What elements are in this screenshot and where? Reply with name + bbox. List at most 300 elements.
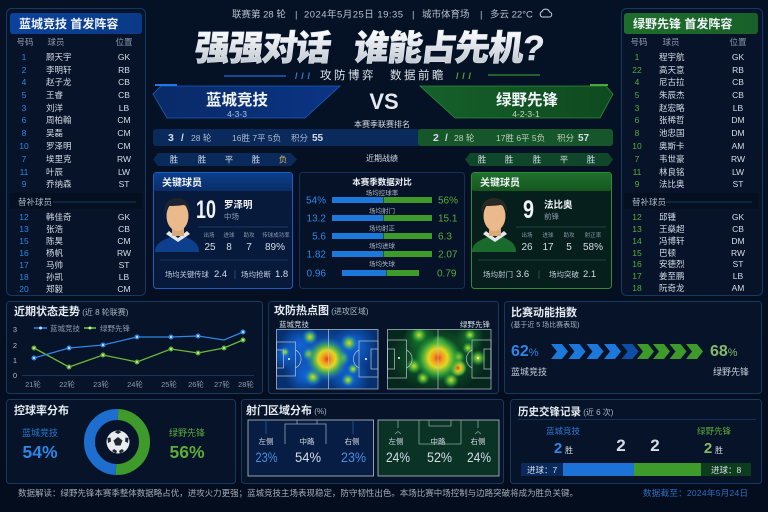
blue starters table: 罗泽明 [46,141,72,151]
green starters table: 池忠国 [659,128,685,138]
blue starters table: 埃里克 [46,154,72,164]
green starters table: LB [733,103,744,113]
season rank bar: 57 [578,133,590,144]
blue wins: 2 [554,440,562,457]
blue starters table: 2 [22,65,27,75]
stats: 58% [583,242,603,253]
season rank bar: 3 [168,132,174,144]
heading: 关键球员 [480,176,520,189]
icon: cloud [540,9,552,17]
shot zones: blue: 54% [295,450,321,465]
green substitutes table: 12 [632,212,642,222]
green starters table: 球员 [662,37,680,47]
blue substitutes table: CM [117,236,131,246]
per-game stats [483,269,596,280]
axis labels: 25轮 [161,379,177,389]
shot zones: blue: 右侧 [344,436,360,446]
row: conceded: 场均失球 [369,259,396,268]
green substitutes table: LB [733,271,744,281]
recent form: blue: 胜 [252,154,261,164]
blue starters table: CM [117,128,131,138]
stats: 助攻 [243,231,255,239]
per-game stats: 3.6 [516,269,529,280]
season rank bar: 55 [312,133,324,144]
subtitle: 数据前瞻 [390,68,446,82]
blue starters table: 11 [20,167,29,177]
row: possession [306,188,458,206]
panel: shot zones: 射门区域分布 (%) [246,403,327,417]
panel: shot zones [242,400,504,484]
season rank bar: / [181,133,184,144]
green starters table: 法比奥 [659,179,685,189]
green substitutes table: 姜至鹏 [659,271,685,281]
row: possession: 56% [438,196,458,206]
green starters table: 10 [632,141,642,151]
donut [89,414,145,470]
axis labels: 28轮 [238,379,254,389]
stats: 5 [566,242,572,253]
recent form: green: 胜 [533,154,542,164]
shot zones: blue: 左侧 [258,436,274,446]
match info bar: 多云 22°C [490,8,533,20]
name: 前锋 [544,211,559,221]
blue substitutes table: 20 [19,284,29,294]
green starters table: 位置 [729,37,747,47]
recent form: blue: 负 [279,154,287,164]
subtitle: /// [456,71,471,81]
blue substitutes table: 16 [19,248,29,258]
stats: 25 [204,242,216,253]
green starters table: 赵宏略 [659,103,685,113]
stats: 出场 [521,231,533,239]
green starters table: DM [731,115,745,125]
axis labels: 23轮 [93,379,109,389]
stats: 17 [542,242,554,253]
blue starters table [16,37,133,189]
panel: season data comparison [300,172,464,288]
panel: attack heatmap [268,302,498,398]
stats: 8 [226,242,232,253]
row: goals: 场均进球 [369,241,396,250]
green starters table: 6 [635,115,640,125]
blue starters table: 4 [22,77,27,87]
green starters table: 9 [635,179,640,189]
season rank bar: 积分 [291,133,309,143]
blue starters table: CB [118,77,130,87]
green wins: 胜 [715,445,723,455]
green substitutes table: DM [731,236,745,246]
green substitutes table: 18 [632,283,642,293]
blue substitutes table: 韩佳奇 [46,212,72,222]
green starters table: AM [732,141,744,151]
per-game stats: 2.1 [583,269,596,280]
row: conceded: 0.96 [307,268,326,280]
green wins [697,426,731,457]
heading: 关键球员 [162,176,202,189]
blue team banner: 4-3-3 [227,109,247,119]
name [544,199,573,221]
stats: 26 [521,242,533,253]
blue starters table: 1 [22,52,27,62]
stats: 7 [246,242,252,253]
blue substitutes table: 13 [19,224,29,234]
recent form: green: 胜 [505,154,514,164]
recent form: green: 胜 [478,154,487,164]
per-game stats: 场均射门 [483,269,513,279]
row: conceded [307,259,457,280]
goals bar: 进球：7 [527,465,558,475]
blue substitutes table: GK [118,212,130,222]
green starters table: 1 [635,52,640,62]
name: 中场 [224,211,239,221]
per-game stats: 1.8 [275,269,288,280]
green starters table: LW [732,167,744,177]
goals bar: 进球：8 [711,465,742,475]
panel: recent form trend [6,302,262,394]
green share: 56% [169,442,205,462]
blue starters table: 10 [19,141,29,151]
green wins: 2 [704,440,712,457]
green starters table: 11 [633,167,642,177]
stats: 射正率 [585,231,602,239]
axis labels: 26轮 [188,379,204,389]
green substitutes table: 冯博轩 [659,236,685,246]
blue starters table: 球员 [47,37,65,47]
blue starters table: LB [119,103,130,113]
blue starters table: 3 [22,103,27,113]
draws: 2 [650,436,660,455]
blue starters table: ST [119,179,129,189]
blue team banner [153,85,340,119]
green team banner: 绿野先锋 [496,90,558,109]
green team banner: 4-2-3-1 [512,109,540,119]
green starters table: 朱辰杰 [659,90,685,100]
blue wins [546,426,580,457]
blue starters table: CB [118,90,130,100]
per-game stats: 场均突破 [549,269,579,279]
line: blue [32,330,245,360]
row: goals [307,241,458,260]
green starters table: 尼古拉 [659,77,685,87]
jersey number: 9 [523,196,534,224]
match info bar: | [412,10,414,20]
panel: attack heatmap: 攻防热点图 (进攻区域) [274,303,369,317]
season rank caption: 本赛季联赛排名 [354,119,410,129]
blue starters table: 号码 [16,37,34,47]
green starters table: RB [732,65,744,75]
green substitutes table: 17 [632,271,642,281]
green starters table: 程宇航 [659,52,685,62]
recent form: green [465,153,613,166]
panel: season data comparison: 本赛季数据对比 [352,177,412,187]
recent form: blue [153,153,297,166]
green starters table: 奥斯卡 [659,141,685,151]
blue starters table: LW [118,167,130,177]
blue starters table: CM [117,115,131,125]
panel: blue team lineup [6,8,146,296]
match info bar: | [480,10,482,20]
blue starters table: 周柏翰 [46,115,72,125]
blue starters table: 9 [22,179,27,189]
row: shots on target: 6.3 [438,232,452,242]
blue substitutes table: 17 [19,260,29,270]
per-game stats: 2.4 [214,269,227,280]
chevrons [551,344,703,359]
blue starters table: 顾天宇 [46,52,72,62]
green substitutes table: 巴顿 [659,248,677,258]
axis labels [13,325,254,389]
panel: green key player [472,172,612,288]
blue substitutes table: 陈昊 [46,236,64,246]
panel: possession distribution: 控球率分布 [14,403,69,417]
panel: recent form trend: 近期状态走势 (近 8 轮联赛) [14,304,129,318]
blue starters table: 李明轩 [46,65,72,75]
shot zones: blue: 中路 [300,436,315,446]
green starters table: 8 [635,128,640,138]
green substitutes table: AM [732,283,744,293]
row: possession: 场均控球率 [366,188,399,197]
blue substitutes table: 杨帆 [46,248,64,258]
blue starters table: 位置 [115,37,133,47]
season rank bar: 28 轮 [191,133,212,143]
green starters table: 22 [632,65,642,75]
stats: 助攻 [563,231,575,239]
green starters table: 高天意 [659,65,685,75]
name: 法比奥 [544,199,573,211]
panel: momentum index: 蓝城竞技 [511,366,547,377]
shot zones: green [378,420,499,476]
blue substitutes table: 马帅 [46,260,63,270]
stats [198,227,290,253]
main title [193,29,546,68]
heatmap: blue team [276,329,378,390]
blue value: 62% [511,343,539,360]
green starters table: 韦世豪 [659,154,685,164]
main title: 谁能占先机? [352,29,546,68]
axis labels: 3 [13,325,17,334]
green substitutes table: 13 [632,224,642,234]
blue starters table: 6 [22,115,27,125]
green substitutes table: CB [732,224,744,234]
recent form: blue: 胜 [170,154,179,164]
green share: 绿野先锋 [169,427,205,438]
green substitutes table: ST [733,259,743,269]
axis labels: 22轮 [59,379,75,389]
blue substitutes table: LB [119,272,130,282]
match info bar: 联赛第 28 轮 [232,8,286,20]
blue substitutes table: RW [117,248,131,258]
green substitutes table: 15 [632,248,642,258]
blue substitutes table: 18 [19,272,29,282]
green starters table: 号码 [630,37,648,47]
panel: momentum index: (基于近 5 场比赛表现) [511,320,579,329]
blue substitutes table: 张浩 [46,224,64,234]
green starters table: GK [732,52,744,62]
row: shots on target [312,224,452,242]
shot zones: green: 左侧 [388,436,404,446]
row: goals: 2.07 [438,250,458,260]
axis labels: 27轮 [214,379,230,389]
draws: 2 [616,436,626,455]
recent form: blue: 平 [225,154,234,164]
VS: VS [369,89,399,114]
subtitle [224,68,540,82]
recent form: blue: 胜 [198,154,207,164]
name [224,199,253,221]
blue substitutes table: 孙凯 [46,272,64,282]
blue substitutes table: ST [119,260,129,270]
blue team banner: 蓝城竞技 [206,90,268,109]
blue substitutes table [10,193,142,294]
line: green [32,338,245,369]
axis labels: 1 [13,356,17,365]
shot zones: blue: 23% [256,450,278,465]
blue share [22,427,58,462]
green team banner [420,85,613,119]
green starters table [630,37,747,189]
avatar [472,198,516,252]
recent form caption: 近期战绩 [366,153,398,163]
match info bar: 2024年5月25日 19:35 [304,8,403,20]
row: shots: 15.1 [438,214,458,224]
blue starters table: 刘洋 [46,103,64,113]
row: shots on target: 场均射正 [369,224,396,232]
stats: 出场 [203,231,215,239]
season rank bar [153,129,613,146]
season rank bar: / [445,133,448,144]
panel: momentum index: 绿野先锋 [713,366,749,377]
axis labels: 24轮 [127,379,143,389]
stats: 进球 [223,231,235,239]
season rank bar: 2 [433,132,439,144]
footer: data date: 数据截至：2024年5月24日 [643,488,748,498]
panel: momentum index [504,302,762,394]
blue share: 蓝城竞技 [22,427,58,438]
green starters table: 7 [635,154,640,164]
green starters table: CB [732,90,744,100]
blue starters table: 8 [22,128,27,138]
green substitutes table: GK [732,212,744,222]
shot zones: green: 52% [427,450,452,465]
green substitutes table: 14 [632,236,642,246]
panel: head-to-head history: 历史交锋记录 (近 6 次) [518,405,614,418]
avatar [155,198,199,252]
row: goals: 1.82 [307,250,326,260]
goals bar [521,463,751,476]
green value: 68% [710,343,738,360]
jersey number: 10 [196,196,216,224]
axis labels: 0 [13,371,17,380]
panel: blue key player [154,172,292,288]
match info bar [232,8,552,20]
row: shots on target: 5.6 [312,232,326,242]
stats: 89% [265,242,285,253]
season rank bar: 积分 [557,133,575,143]
green starters table: DM [731,128,745,138]
blue substitutes table: CB [118,224,130,234]
blue starters table: GK [118,52,130,62]
blue starters table: RW [117,154,131,164]
row: shots: 13.2 [307,214,326,224]
match info bar: 城市体育场 [422,8,470,20]
green wins: 绿野先锋 [697,426,731,436]
blue starters table: 乔纳森 [46,179,72,189]
blue lineup heading [10,13,142,34]
green lineup heading [624,13,758,34]
green starters table: 林良铭 [659,167,685,177]
row: conceded: 0.79 [437,268,457,280]
panel: momentum index: 比赛动能指数 [511,305,577,319]
draws [616,436,660,455]
green starters table: CB [732,77,744,87]
season rank bar: 17胜 6平 5负 [496,133,545,143]
green starters table: 5 [635,90,640,100]
blue substitutes table: 15 [19,236,29,246]
blue starters table: RB [118,65,130,75]
blue starters table: CM [117,141,131,151]
green substitutes table: 邱锺 [659,212,677,222]
panel: attack heatmap: 绿野先锋 [460,319,490,329]
row: possession: 54% [306,196,326,206]
blue substitutes table: 12 [19,212,29,222]
row: shots [307,206,458,224]
shot zones: blue [248,420,374,476]
green substitutes table: 安德烈 [659,259,685,269]
shot zones: blue: 23% [341,450,366,465]
subtitle: /// [295,71,310,81]
blue wins: 胜 [565,445,573,455]
green substitutes table: RW [731,248,745,258]
legend: 蓝城竞技 [50,323,80,333]
green starters table: RW [731,154,745,164]
name: 罗泽明 [224,199,253,211]
panel: attack heatmap: 蓝城竞技 [279,319,309,329]
shot zones: green: 中路 [430,436,446,446]
shot zones: green: 右侧 [470,436,486,446]
panel: green team lineup [622,8,762,296]
stats: 进球 [542,231,554,239]
blue starters table: 7 [22,154,27,164]
subtitle: 攻防博弈 [320,68,376,82]
match info bar: | [295,10,297,20]
green substitutes table: 替补球员 [632,197,666,207]
blue wins: 蓝城竞技 [546,426,580,436]
green substitutes table: 王燊超 [659,224,685,234]
legend [34,323,130,333]
green substitutes table: 阮奇龙 [659,283,685,293]
icon: football [106,430,130,454]
stats: 传球成功率 [262,231,290,239]
shot zones: green: 24% [467,450,491,465]
panel: head-to-head history [510,400,762,484]
blue lineup heading: 蓝城竞技 首发阵容 [19,16,118,31]
recent form: green: 胜 [587,154,596,164]
heatmap: green team [387,329,492,390]
per-game stats: 场均关键传球 [165,270,209,279]
season rank bar: 28 轮 [454,133,475,143]
green lineup heading: 绿野先锋 首发阵容 [633,16,732,31]
green substitutes table [624,193,758,293]
green starters table: 4 [635,77,640,87]
per-game stats: 场均抢断 [241,269,271,279]
row: shots: 场均射门 [369,206,395,215]
legend: 绿野先锋 [100,323,130,333]
per-game stats [165,269,288,280]
blue starters table: 赵子龙 [46,77,72,87]
blue starters table: 叶辰 [46,167,64,177]
green starters table: ST [733,179,743,189]
blue starters table: 5 [22,90,27,100]
